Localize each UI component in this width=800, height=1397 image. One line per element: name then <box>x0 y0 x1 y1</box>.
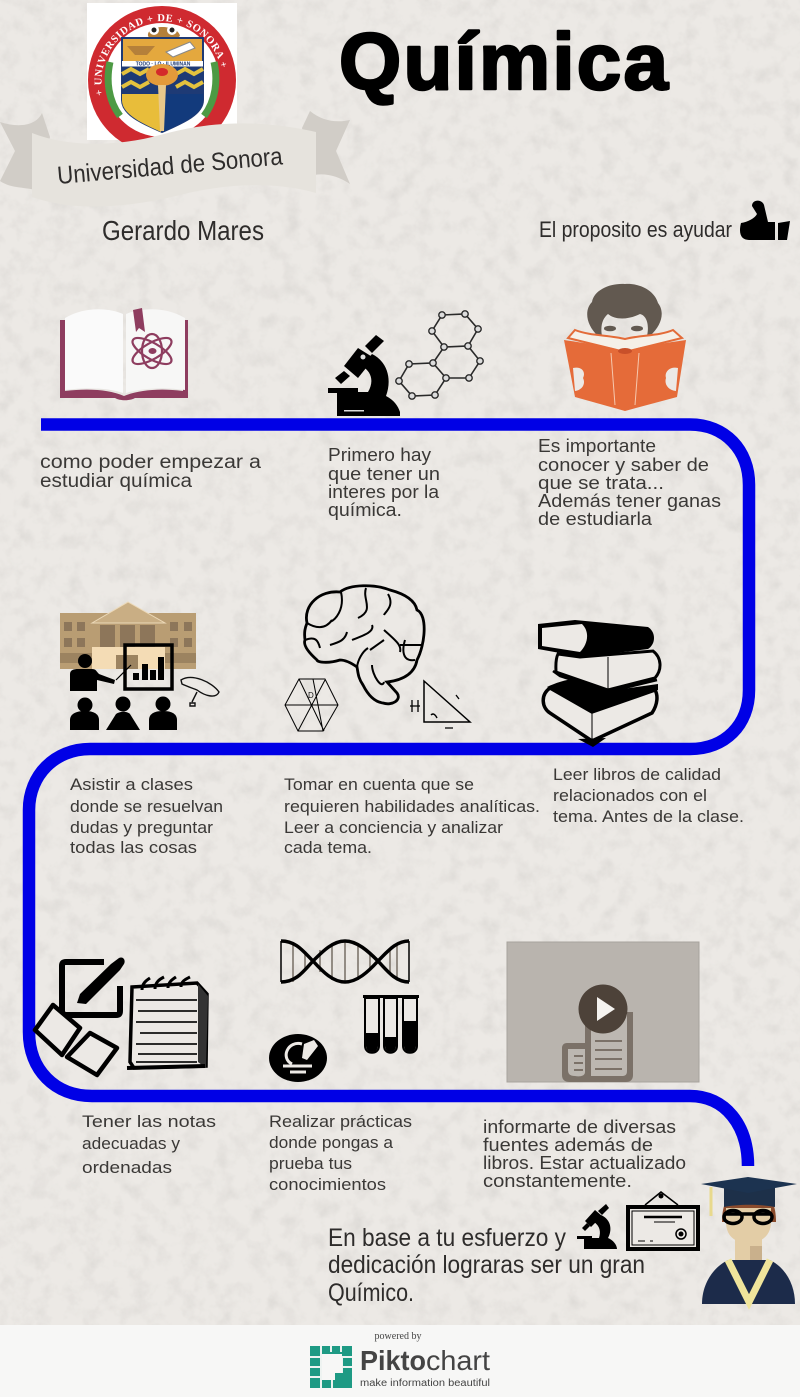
step text: realizar practicas: Realizar prácticas <box>269 1112 412 1131</box>
ribbon banner: Universidad de Sonora <box>0 111 350 207</box>
step text: informarte: informarte de diversas <box>483 1117 676 1137</box>
university crest logo: TODO · LO · ILUMINAN <box>136 62 191 68</box>
conclusion text: Químico. <box>328 1279 414 1307</box>
step text: como poder empezar: como poder empezar a <box>40 452 261 473</box>
icon: graduate figure <box>701 1177 797 1304</box>
icon: brain and geometry sketches <box>285 586 470 731</box>
step text: primero hay: Primero hay <box>328 445 431 465</box>
step text: como poder empezar <box>40 452 261 492</box>
step text: leer libros: tema. Antes de la clase. <box>553 807 744 826</box>
icon: microscope <box>328 335 400 416</box>
step text: es importante: conocer y saber de <box>538 455 709 475</box>
icon: brain and geometry sketches: D <box>308 691 314 700</box>
step text: tomar en cuenta: Tomar en cuenta que se <box>284 775 474 794</box>
icon: pencil in square <box>62 957 125 1015</box>
step text: primero hay: que tener un <box>328 464 440 484</box>
step text: es importante <box>538 436 721 529</box>
step text: tomar en cuenta <box>284 775 540 857</box>
ribbon banner: Universidad de Sonora: Universidad de Sonora <box>56 142 284 190</box>
step text: informarte <box>483 1117 686 1191</box>
step text: tomar en cuenta: requieren habilidades analíticas. <box>284 797 540 816</box>
step text: asistir a clases: donde se resuelvan <box>70 797 223 816</box>
step text: asistir a clases: Asistir a clases <box>70 775 193 794</box>
step text: realizar practicas: donde pongas a <box>269 1133 394 1152</box>
Piktochart wordmark: make information beautiful <box>360 1378 490 1389</box>
step text: tener las notas: adecuadas y <box>82 1134 181 1153</box>
Piktochart wordmark: chart <box>426 1345 490 1376</box>
icon: open book with atom <box>60 308 188 400</box>
icon: test tubes <box>363 995 419 1053</box>
purpose text: El proposito es ayudar <box>539 217 732 242</box>
icon: classroom with building and presenter <box>60 602 219 730</box>
conclusion text <box>328 1224 645 1307</box>
powered by label: powered by <box>375 1331 421 1342</box>
step text: realizar practicas: conocimientos <box>269 1175 386 1194</box>
icon: person reading orange book <box>564 284 686 411</box>
Piktochart wordmark <box>360 1345 490 1389</box>
icon: small microscope <box>577 1204 617 1249</box>
step text: leer libros: Leer libros de calidad <box>553 765 721 784</box>
university crest logo <box>87 3 237 142</box>
step text: informarte: fuentes además de <box>483 1135 653 1155</box>
step text: informarte: libros. Estar actualizado <box>483 1153 686 1173</box>
step text: leer libros <box>553 765 744 826</box>
icon: microscope badge <box>269 1034 327 1082</box>
icon: thumbs up <box>740 201 790 240</box>
timeline path <box>29 424 749 1166</box>
step text: como poder empezar: estudiar química <box>40 471 192 492</box>
conclusion text: En base a tu esfuerzo y <box>328 1224 566 1252</box>
Piktochart wordmark: Pikto <box>360 1345 426 1376</box>
icon: stack of books <box>538 620 660 747</box>
icon: hexagon molecule <box>396 311 483 399</box>
step text: leer libros: relacionados con el <box>553 786 707 805</box>
icon: framed certificate <box>628 1192 698 1249</box>
step text: primero hay <box>328 445 440 520</box>
icon: DNA helix <box>281 941 409 982</box>
step text: tomar en cuenta: Leer a conciencia y analizar <box>284 818 503 837</box>
step text: es importante: de estudiarla <box>538 509 653 529</box>
author name: Gerardo Mares <box>102 215 264 246</box>
step text: tener las notas <box>82 1112 216 1177</box>
step text: asistir a clases: todas las cosas <box>70 838 197 857</box>
step text: primero hay: interes por la <box>328 482 440 502</box>
step text: informarte: constantemente. <box>483 1171 632 1191</box>
step text: es importante: Es importante <box>538 436 656 456</box>
step text: asistir a clases: dudas y preguntar <box>70 818 213 837</box>
conclusion text: dedicación lograras ser un gran <box>328 1251 645 1279</box>
step text: asistir a clases <box>70 775 223 857</box>
video placeholder with play button <box>507 942 699 1082</box>
icon: open book sketch <box>35 1005 117 1075</box>
footer bar <box>0 1325 800 1397</box>
step text: primero hay: química. <box>328 500 402 520</box>
Piktochart logo mark <box>310 1346 352 1388</box>
step text: es importante: Además tener ganas <box>538 491 721 511</box>
icon: spiral notepad <box>127 977 208 1068</box>
step text: tener las notas: Tener las notas <box>82 1112 216 1131</box>
step text: es importante: que se trata... <box>538 473 664 493</box>
university crest logo: + UNIVERSIDAD + DE + SONORA + <box>94 14 226 96</box>
step text: realizar practicas: prueba tus <box>269 1154 352 1173</box>
step text: tener las notas: ordenadas <box>82 1158 172 1177</box>
step text: tomar en cuenta: cada tema. <box>284 838 372 857</box>
step text: realizar practicas <box>269 1112 412 1194</box>
title: Química <box>339 17 668 106</box>
